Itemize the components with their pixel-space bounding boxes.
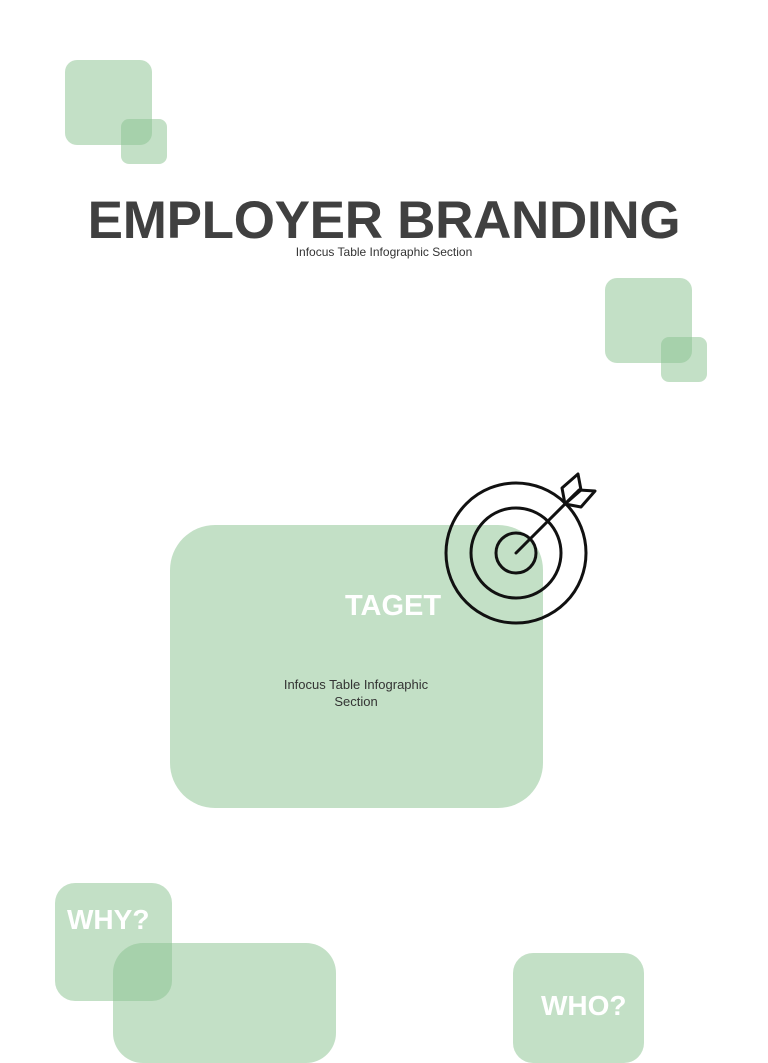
decor: top-left big square [65, 60, 152, 145]
subtitle: Infocus Table Infographic Section [296, 245, 472, 259]
panel text: Section [334, 694, 378, 709]
decor: right big square [605, 278, 692, 363]
decor: top-left small square [121, 119, 167, 164]
decor: right small square [661, 337, 707, 382]
box: WHO? [513, 953, 644, 1063]
label: WHY?: WHY? [67, 904, 149, 935]
panel text [284, 677, 428, 709]
panel text: Infocus Table Infographic [284, 677, 428, 692]
label: WHO?: WHO? [541, 990, 627, 1021]
panel: target [170, 525, 543, 808]
panel heading: TAGET: TAGET [345, 590, 441, 622]
decor: lower wide box [113, 943, 336, 1063]
icon: target with arrow [444, 472, 597, 624]
title: EMPLOYER BRANDING [88, 191, 680, 250]
box: WHY? [55, 883, 172, 1001]
